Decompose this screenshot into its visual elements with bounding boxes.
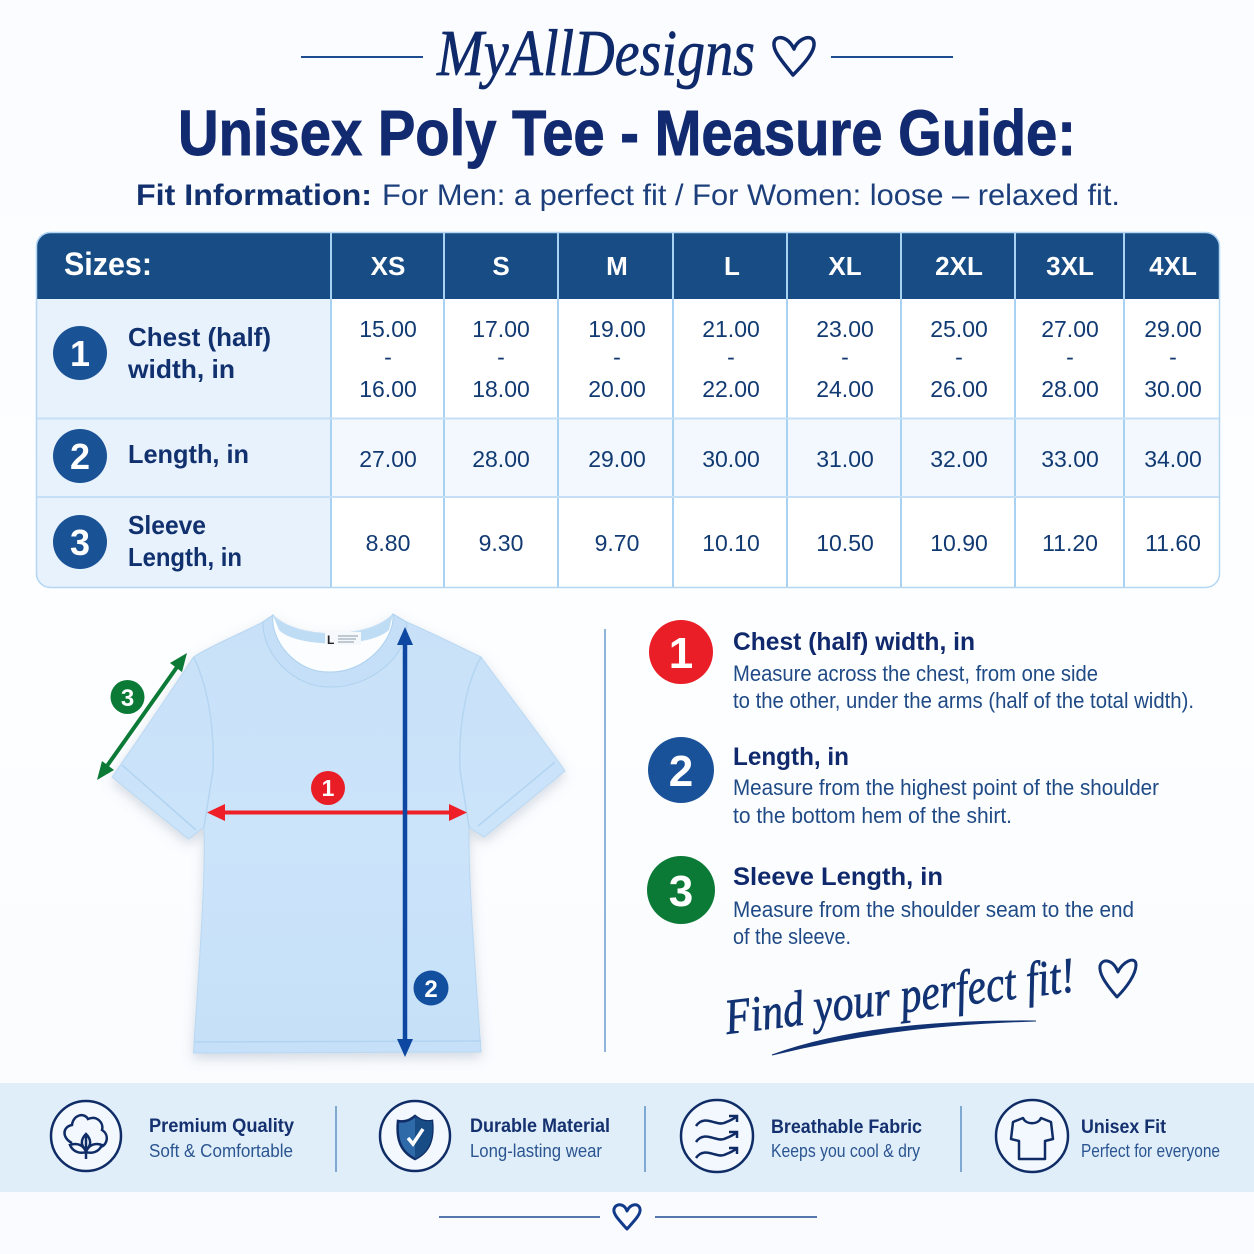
measure 1: chest	[649, 620, 1194, 713]
row: chest	[53, 316, 1202, 402]
measure 2: length: Length, in	[733, 743, 849, 771]
row: length: 33.00	[1041, 446, 1099, 472]
row: chest: 1	[70, 333, 90, 374]
measure 3: sleeve: Measure from the shoulder seam to the end	[733, 897, 1134, 922]
row: chest: -	[613, 344, 621, 370]
row: chest: 24.00	[816, 376, 874, 402]
feature: durable material: Durable Material	[470, 1116, 610, 1137]
feature: unisex fit: Unisex Fit	[1081, 1117, 1167, 1138]
t-shirt diagram	[97, 614, 565, 1057]
measure 1: chest: Chest (half) width, in	[733, 628, 975, 656]
measure 2: length: to the bottom hem of the shirt.	[733, 803, 1012, 828]
row: chest: 16.00	[359, 376, 417, 402]
measure 3: sleeve	[647, 856, 1134, 949]
row: chest: width, in	[127, 354, 235, 384]
row: chest: 17.00	[472, 316, 530, 342]
measure 2: length	[648, 737, 1159, 828]
row: chest: 29.00	[1144, 316, 1202, 342]
measure 3: sleeve: 3	[669, 867, 693, 916]
arrow 3: sleeve length: 3	[121, 685, 134, 712]
measure 3: sleeve: Sleeve Length, in	[733, 863, 943, 891]
arrow 1: chest width: 1	[322, 775, 335, 801]
row: chest: Chest (half)	[128, 322, 271, 352]
feature: premium quality	[51, 1101, 294, 1171]
measure 2: length: Measure from the highest point of the shoulder	[733, 775, 1159, 800]
table header row: 3XL	[1046, 251, 1094, 281]
row: sleeve length: Length, in	[128, 542, 242, 572]
row: length: 31.00	[816, 446, 874, 472]
title: Unisex Poly Tee - Measure Guide:	[178, 97, 1076, 169]
measure 3: sleeve: of the sleeve.	[733, 924, 851, 949]
row: length: 30.00	[702, 446, 760, 472]
row: sleeve length	[53, 510, 1201, 572]
bottom ornament	[439, 1205, 817, 1229]
row: sleeve length: Sleeve	[128, 510, 206, 540]
feature: unisex fit: Perfect for everyone	[1081, 1141, 1220, 1161]
feature: premium quality: Premium Quality	[149, 1116, 294, 1137]
table header row: XL	[828, 251, 862, 281]
table header row: XS	[371, 251, 405, 281]
row: sleeve length: 10.50	[816, 530, 874, 556]
fit information: For Men: a perfect fit / For Women: loose – relaxed fit.	[382, 179, 1120, 212]
table header row	[64, 246, 1197, 282]
row: chest: -	[497, 344, 505, 370]
row: chest: -	[727, 344, 735, 370]
row: chest: 21.00	[702, 316, 760, 342]
measure 1: chest: to the other, under the arms (half of the total width).	[733, 688, 1194, 713]
row: length: 34.00	[1144, 446, 1202, 472]
row: length: 29.00	[588, 446, 646, 472]
tagline: find your perfect fit: Find your perfect fit!	[721, 946, 1078, 1045]
measure 2: length: 2	[669, 747, 693, 796]
row: sleeve length: 11.20	[1042, 530, 1098, 556]
row: chest: 28.00	[1041, 376, 1099, 402]
feature: breathable fabric: Keeps you cool & dry	[771, 1141, 920, 1161]
feature: unisex fit	[996, 1100, 1220, 1172]
row: length: 28.00	[472, 446, 530, 472]
row: chest: 20.00	[588, 376, 646, 402]
row: chest: 22.00	[702, 376, 760, 402]
row: chest: 25.00	[930, 316, 988, 342]
row: sleeve length: 10.90	[930, 530, 988, 556]
arrow 3: sleeve length	[97, 653, 187, 780]
row: chest: 27.00	[1041, 316, 1099, 342]
row: chest: 15.00	[359, 316, 417, 342]
row: sleeve length: 9.70	[595, 530, 639, 556]
feature: premium quality: Soft & Comfortable	[149, 1141, 293, 1161]
brand header: MyAllDesigns	[436, 17, 755, 90]
row: sleeve length: 3	[70, 522, 90, 563]
table header row: M	[606, 251, 628, 281]
row: sleeve length: 10.10	[702, 530, 760, 556]
feature: breathable fabric	[681, 1100, 922, 1172]
row: chest: -	[1169, 344, 1177, 370]
feature: breathable fabric: Breathable Fabric	[771, 1117, 922, 1138]
row: sleeve length: 9.30	[479, 530, 523, 556]
row: length: 2	[70, 436, 90, 477]
row: chest: -	[1066, 344, 1074, 370]
table header row: L	[724, 251, 740, 281]
row: chest: -	[955, 344, 963, 370]
table header row: S	[492, 251, 510, 281]
row: length: 27.00	[359, 446, 417, 472]
row: sleeve length: 11.60	[1145, 530, 1201, 556]
row: chest: 23.00	[816, 316, 874, 342]
arrow 2: length	[397, 627, 448, 1057]
row: length: 32.00	[930, 446, 988, 472]
measure 1: chest: Measure across the chest, from one side	[733, 661, 1098, 686]
neck label: L	[327, 633, 334, 647]
row: chest: 19.00	[588, 316, 646, 342]
table header row: Sizes:	[64, 246, 152, 282]
row: chest: 30.00	[1144, 376, 1202, 402]
row: sleeve length: 8.80	[366, 530, 410, 556]
fit information: Fit Information:	[136, 179, 372, 212]
neck label	[325, 632, 361, 647]
row: length: Length, in	[128, 439, 249, 469]
table header row: 2XL	[935, 251, 983, 281]
brand header	[301, 17, 953, 90]
vertical divider	[604, 629, 606, 1052]
feature: durable material: Long-lasting wear	[470, 1141, 602, 1161]
t-shirt	[112, 614, 565, 1053]
size table	[36, 232, 1220, 588]
measure 1: chest: 1	[669, 629, 693, 678]
feature: durable material	[380, 1101, 610, 1171]
table header row: 4XL	[1149, 251, 1197, 281]
row: length	[53, 429, 1202, 483]
row: chest: 26.00	[930, 376, 988, 402]
row: chest: -	[841, 344, 849, 370]
feature band	[0, 1083, 1254, 1192]
arrow 1: chest width	[207, 771, 467, 821]
row: chest: -	[384, 344, 392, 370]
arrow 2: length: 2	[424, 976, 438, 1003]
row: chest: 18.00	[472, 376, 530, 402]
